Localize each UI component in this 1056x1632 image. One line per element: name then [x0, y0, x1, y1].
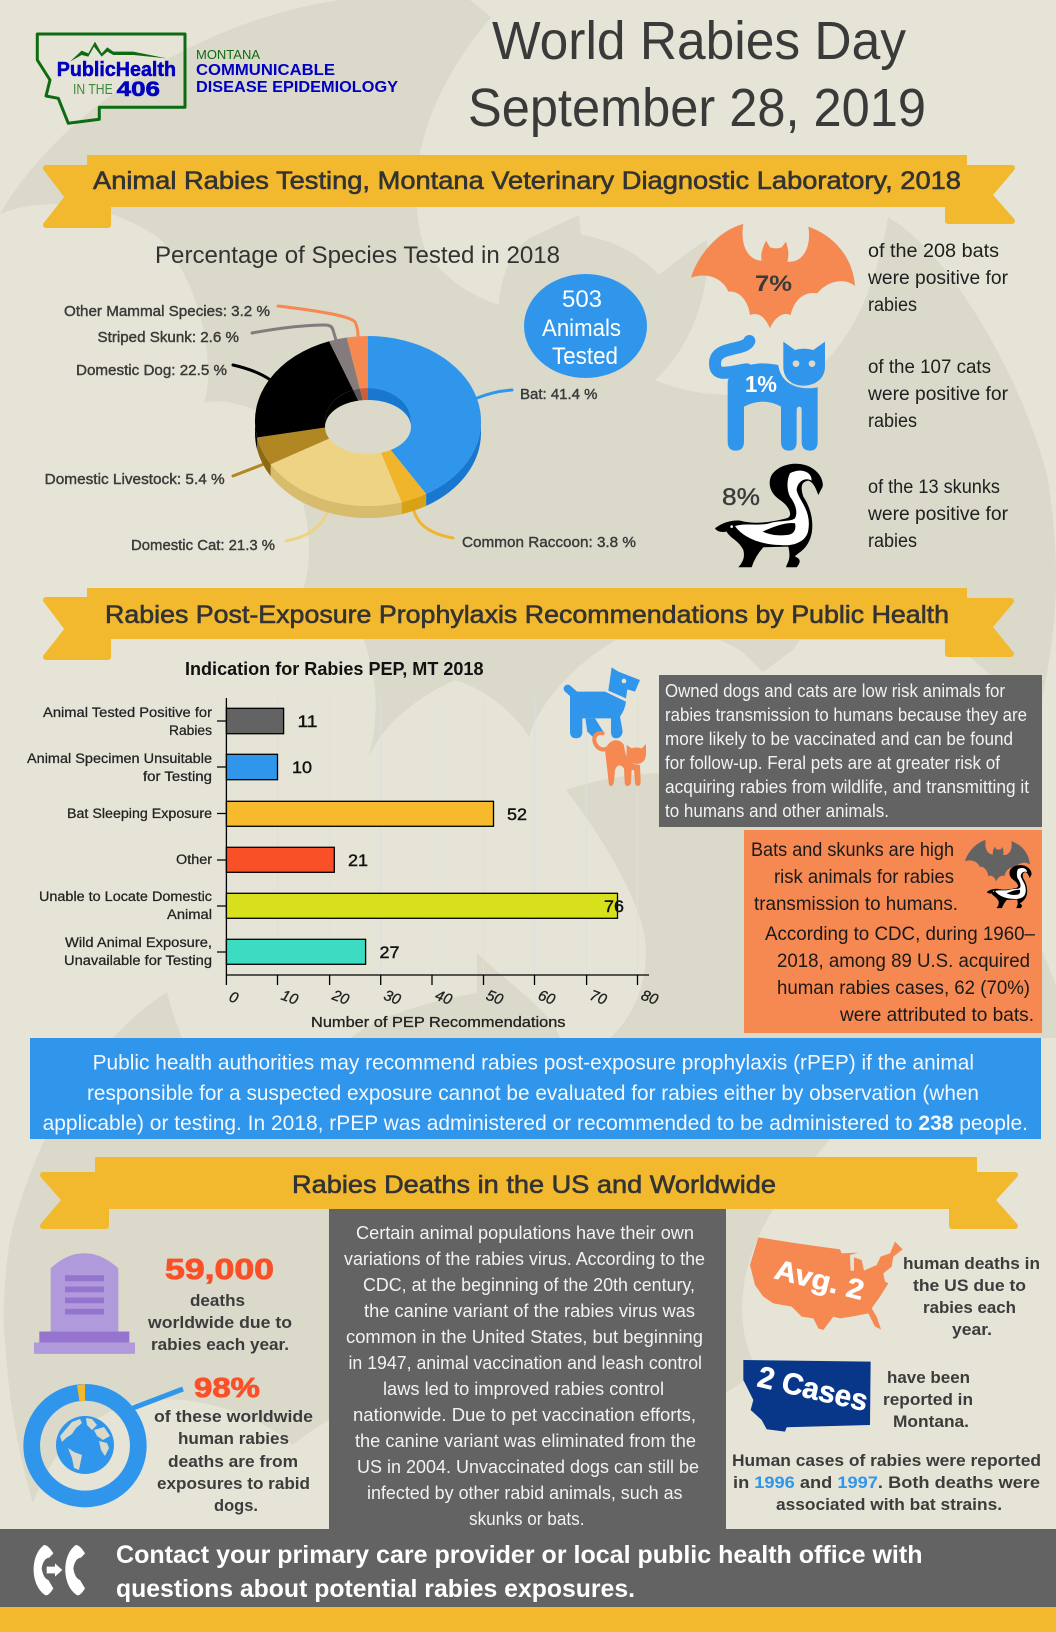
axis tick labels: 30 — [381, 987, 404, 1009]
text: US deaths: human deaths in — [903, 1254, 1040, 1273]
bar values: 11 — [298, 712, 318, 731]
text: human cases years: associated with bat strains. — [776, 1495, 1002, 1514]
panel: blue rPEP statement — [30, 1038, 1041, 1139]
title — [468, 11, 926, 138]
donut chart: species tested: Domestic Livestock: 5.4 % — [45, 471, 225, 488]
donut chart: species tested: Common Raccoon: 3.8 % — [462, 534, 636, 551]
panel: canine variant history: CDC, at the beginning of the 20th century, — [363, 1274, 695, 1295]
bar chart: indication for PEP: Rabies — [169, 723, 212, 738]
text: bats positive: of the 208 bats — [868, 241, 999, 262]
logo: Public Health in the 406: DISEASE EPIDEMIOLOGY — [196, 79, 398, 96]
icon: blue cat 1% — [715, 341, 825, 451]
axis tick labels: 0 — [227, 988, 241, 1007]
logo: Public Health in the 406: COMMUNICABLE — [196, 62, 335, 79]
text: bats positive — [867, 241, 1009, 316]
logo: Public Health in the 406: 406 — [117, 78, 160, 101]
text: Montana cases — [883, 1368, 973, 1431]
panel: canine variant history: laws led to improved rabies control — [383, 1378, 664, 1399]
bar chart: indication for PEP: 10 — [292, 758, 312, 777]
stat: 59,000 deaths: deaths — [190, 1291, 245, 1310]
bar chart: indication for PEP: Wild Animal Exposure, — [65, 935, 212, 950]
stat: 98% from dogs: dogs. — [214, 1496, 258, 1515]
text: US deaths: the US due to — [913, 1276, 1026, 1295]
text: cats positive: were positive for — [867, 384, 1009, 405]
text: US deaths: rabies each — [923, 1298, 1016, 1317]
panel: owned dogs and cats: to humans and other animals. — [665, 801, 889, 821]
icon: US map avg 2: Avg. 2 — [772, 1254, 867, 1306]
icon: skunk 8%: 8% — [722, 484, 760, 511]
panel text: human rabies cases, 62 (70%) — [777, 977, 1030, 999]
inner wall and hole — [368, 388, 411, 449]
bar chart: indication for PEP: 76 — [604, 897, 624, 916]
text: skunks positive: were positive for — [867, 504, 1009, 525]
panel text: 2018, among 89 U.S. acquired — [777, 950, 1030, 972]
text: Montana cases: Montana. — [893, 1412, 969, 1431]
logo: Public Health in the 406: PublicHealth — [57, 59, 176, 81]
panel text: Bats and skunks are high — [751, 839, 954, 861]
panel: owned dogs and cats: for follow-up. Feral pets are at greater risk of — [665, 753, 1001, 773]
panel: canine variant history: nationwide. Due to pet vaccination efforts, — [353, 1404, 696, 1425]
bar chart: indication for PEP: Unable to Locate Domestic — [39, 889, 212, 904]
text: US deaths: year. — [952, 1320, 992, 1339]
axes — [217, 698, 649, 985]
panel text: risk animals for rabies — [774, 866, 954, 888]
icon: gray bat — [965, 840, 1030, 881]
logo: Public Health in the 406 — [37, 34, 398, 123]
axis tick labels: 50 — [484, 987, 506, 1009]
text: skunks positive: rabies — [868, 531, 917, 552]
donut chart: species tested — [45, 303, 636, 554]
donut chart: species tested: Bat: 41.4 % — [520, 386, 598, 403]
panel: canine variant history: common in the United States, but beginning — [346, 1326, 703, 1347]
bar chart: indication for PEP: Bat Sleeping Exposure — [67, 806, 212, 821]
category labels: Animal Tested Positive for — [43, 705, 213, 720]
stat: 59,000 deaths: 59,000 — [165, 1254, 274, 1286]
bar chart: indication for PEP: for Testing — [143, 769, 212, 784]
stat: 98% from dogs: deaths are from — [168, 1452, 298, 1471]
icon: skunk 8% — [715, 464, 823, 567]
footer bar: contact — [0, 1529, 1056, 1607]
heading: percentage of species tested: Percentage of Species Tested in 2018 — [155, 242, 560, 269]
icon: Montana map 2 cases: 2 Cases — [754, 1361, 871, 1418]
text: skunks positive: of the 13 skunks — [868, 477, 1000, 498]
icon: globe ring 98% — [32, 1384, 183, 1499]
bars — [226, 708, 618, 964]
donut chart: species tested: Striped Skunk: 2.6 % — [98, 329, 239, 346]
text: skunks positive — [867, 477, 1009, 552]
panel: canine variant history: skunks or bats. — [469, 1508, 584, 1529]
icon: blue dog and orange cat — [568, 667, 646, 786]
banner: animal rabies testing — [46, 155, 1012, 225]
panel: owned dogs and cats: rabies transmission to humans because they are — [665, 705, 1027, 725]
bar chart: indication for PEP: 27 — [380, 943, 400, 962]
banner: PEP recommendations: Rabies Post-Exposure Prophylaxis Recommendations by Public Health — [105, 601, 949, 629]
panel: owned dogs and cats: acquiring rabies from wildlife, and transmitting it — [665, 777, 1029, 797]
leader lines — [233, 306, 512, 541]
stat: 98% from dogs: exposures to rabid — [157, 1474, 310, 1493]
labels: Other Mammal Species: 3.2 % — [64, 303, 270, 320]
callout: 503 animals tested: Animals — [542, 315, 621, 342]
title: World Rabies Day — [492, 11, 906, 71]
side walls — [426, 421, 481, 506]
panel: canine variant history: infected by other rabid animals, such as — [367, 1482, 682, 1503]
panel: owned dogs and cats — [659, 675, 1042, 827]
axis tick labels: 40 — [433, 987, 455, 1009]
stat: 98% from dogs: 98% — [194, 1372, 260, 1403]
icon: blue cat 1%: 1% — [745, 371, 777, 397]
icon: US map avg 2 — [750, 1237, 903, 1330]
footer stripe — [0, 1607, 1056, 1632]
bar chart: indication for PEP: Animal — [167, 907, 212, 922]
stat: 98% from dogs: of these worldwide — [154, 1407, 313, 1426]
panel text: transmission to humans. — [754, 893, 958, 915]
bar chart: indication for PEP: Unavailable for Testing — [64, 953, 212, 968]
icon: phones — [34, 1545, 85, 1595]
axis title: Number of PEP Recommendations — [311, 1014, 566, 1031]
axis tick labels: 60 — [536, 987, 558, 1009]
panel: blue rPEP statement: responsible for a suspected exposure cannot be evaluated for rabies either by observation (when — [87, 1082, 979, 1105]
panel: canine variant history — [329, 1209, 726, 1530]
stat: 98% from dogs — [154, 1372, 313, 1515]
panel: bats and skunks high risk — [744, 830, 1042, 1033]
text: bats positive: were positive for — [867, 268, 1009, 289]
text: bats positive: rabies — [868, 295, 917, 316]
callout: 503 animals tested — [524, 274, 647, 378]
panel: canine variant history: US in 2004. Unvaccinated dogs can still be — [357, 1456, 699, 1477]
axis tick labels: 70 — [587, 987, 610, 1009]
slices — [368, 336, 481, 494]
panel text: were attributed to bats. — [839, 1004, 1034, 1026]
text: human cases years — [732, 1451, 1041, 1514]
donut chart: species tested: Domestic Cat: 21.3 % — [131, 537, 275, 554]
stat: 59,000 deaths: worldwide due to — [147, 1313, 292, 1332]
bar chart: indication for PEP: 21 — [348, 851, 368, 870]
icon: orange bat 7% — [691, 224, 855, 328]
icon: orange bat 7%: 7% — [755, 271, 792, 296]
banner: rabies deaths: Rabies Deaths in the US and Worldwide — [292, 1171, 776, 1199]
text: human cases years: in 1996 and 1997. Both deaths were — [733, 1473, 1040, 1492]
logo: Public Health in the 406: MONTANA — [196, 47, 260, 62]
banner: animal rabies testing: Animal Rabies Testing, Montana Veterinary Diagnostic Laboratory, 2018 — [93, 167, 961, 195]
panel: canine variant history: Certain animal populations have their own — [356, 1222, 694, 1243]
stat: 98% from dogs: human rabies — [178, 1429, 289, 1448]
logo: Public Health in the 406: IN THE — [73, 81, 113, 98]
bar chart: indication for PEP: Animal Specimen Unsuitable — [27, 751, 212, 766]
axis tick labels — [227, 987, 661, 1009]
banner: PEP recommendations — [46, 588, 1011, 657]
bar chart: indication for PEP: Other — [176, 852, 213, 867]
panel: canine variant history: the canine variant was eliminated from the — [355, 1430, 696, 1451]
text: cats positive: of the 107 cats — [868, 357, 991, 378]
text: human cases years: Human cases of rabies were reported — [732, 1451, 1041, 1470]
panel: canine variant history: in 1947, animal vaccination and leash control — [348, 1352, 702, 1373]
bar chart: indication for PEP: 52 — [507, 805, 527, 824]
text: Montana cases: have been — [887, 1368, 970, 1387]
stat: 59,000 deaths — [147, 1254, 292, 1354]
callout: 503 animals tested: Tested — [552, 343, 618, 370]
contact text: Contact your primary care provider or local public health office with — [116, 1541, 922, 1569]
panel: owned dogs and cats: Owned dogs and cats are low risk animals for — [665, 681, 1005, 701]
text: cats positive: rabies — [868, 411, 917, 432]
panel text — [751, 839, 1035, 1026]
title: September 28, 2019 — [468, 78, 926, 138]
icon: gravestone — [34, 1253, 135, 1354]
text: US deaths — [903, 1254, 1040, 1339]
donut chart: species tested: Domestic Dog: 22.5 % — [76, 362, 227, 379]
panel text: According to CDC, during 1960– — [765, 923, 1035, 945]
axis tick labels: 10 — [279, 987, 301, 1009]
chart title: Indication for Rabies PEP, MT 2018 — [185, 659, 484, 679]
panel: blue rPEP statement: applicable) or testing. In 2018, rPEP was administered or recommended to be administered to 238 people. — [43, 1112, 1028, 1135]
banner: rabies deaths — [43, 1157, 1015, 1226]
callout: 503 animals tested: 503 — [562, 286, 602, 313]
icon: small skunk — [987, 865, 1032, 908]
axis tick labels: 20 — [329, 987, 352, 1009]
axis tick labels: 80 — [639, 987, 661, 1009]
panel: canine variant history: the canine variant of the rabies virus was — [364, 1300, 695, 1321]
panel: canine variant history: variations of the rabies virus. According to the — [344, 1248, 705, 1269]
panel: blue rPEP statement: Public health authorities may recommend rabies post-exposure prophylaxis (rPEP) if the animal — [93, 1052, 974, 1074]
gridlines — [278, 698, 638, 975]
text: cats positive — [867, 357, 1009, 432]
text: Montana cases: reported in — [883, 1390, 973, 1409]
footer bar: contact: questions about potential rabies exposures. — [116, 1575, 635, 1603]
stat: 59,000 deaths: rabies each year. — [151, 1335, 289, 1354]
bar chart: indication for PEP — [27, 659, 661, 1031]
panel: owned dogs and cats: more likely to be vaccinated and can be found — [665, 729, 1013, 749]
